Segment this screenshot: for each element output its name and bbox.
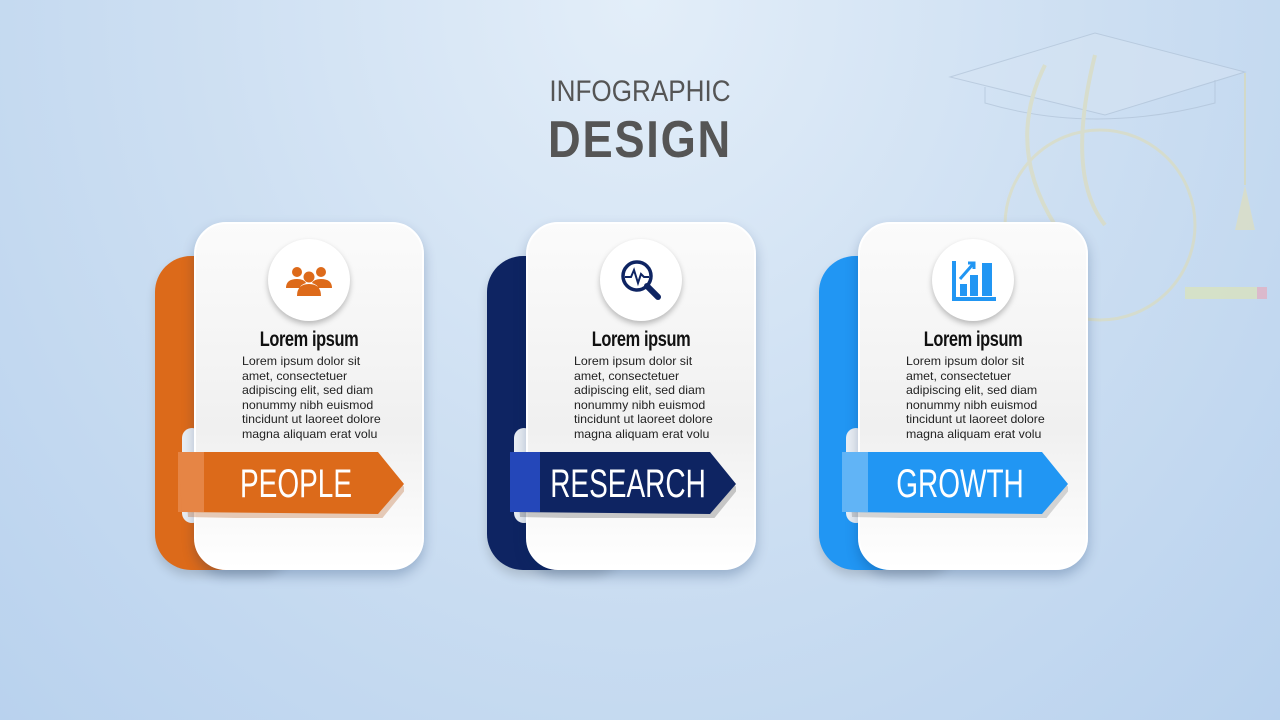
heading: Lorem ipsum — [260, 328, 358, 351]
text block: adipiscing elit, sed diam — [906, 383, 1037, 397]
text block: amet, consectetuer — [574, 369, 679, 383]
text block — [242, 354, 381, 441]
title: INFOGRAPHIC — [549, 75, 731, 108]
icon: magnifier — [600, 239, 682, 321]
text block — [906, 354, 1045, 441]
ribbon: RESEARCH: RESEARCH — [550, 462, 706, 506]
heading: Lorem ipsum — [924, 328, 1022, 351]
ribbon: GROWTH — [842, 452, 1068, 518]
text block: adipiscing elit, sed diam — [574, 383, 705, 397]
panel: growth — [816, 222, 1094, 583]
text block: Lorem ipsum dolor sit — [574, 354, 692, 368]
text block: Lorem ipsum dolor sit — [242, 354, 360, 368]
ribbon: PEOPLE — [178, 452, 404, 518]
text block: magna aliquam erat volu — [906, 427, 1041, 441]
text block: nonummy nibh euismod — [906, 398, 1037, 412]
text block — [574, 354, 713, 441]
watermark: graduation cap logo — [948, 32, 1267, 322]
text block: tincidunt ut laoreet dolore — [906, 412, 1045, 426]
ribbon: GROWTH: GROWTH — [896, 462, 1024, 506]
text block: nonummy nibh euismod — [574, 398, 705, 412]
text block: tincidunt ut laoreet dolore — [242, 412, 381, 426]
text block: amet, consectetuer — [906, 369, 1011, 383]
text block: nonummy nibh euismod — [242, 398, 373, 412]
icon: growth chart — [932, 239, 1014, 321]
ribbon: PEOPLE: PEOPLE — [240, 462, 352, 506]
title — [548, 75, 732, 169]
text block: magna aliquam erat volu — [574, 427, 709, 441]
panel: research — [484, 222, 762, 583]
text block: amet, consectetuer — [242, 369, 347, 383]
ribbon: RESEARCH — [510, 452, 736, 518]
icon: people — [268, 239, 350, 321]
panel: people — [152, 222, 430, 583]
heading: Lorem ipsum — [592, 328, 690, 351]
text block: tincidunt ut laoreet dolore — [574, 412, 713, 426]
text block: Lorem ipsum dolor sit — [906, 354, 1024, 368]
text block: magna aliquam erat volu — [242, 427, 377, 441]
title: DESIGN — [548, 111, 732, 169]
text block: adipiscing elit, sed diam — [242, 383, 373, 397]
